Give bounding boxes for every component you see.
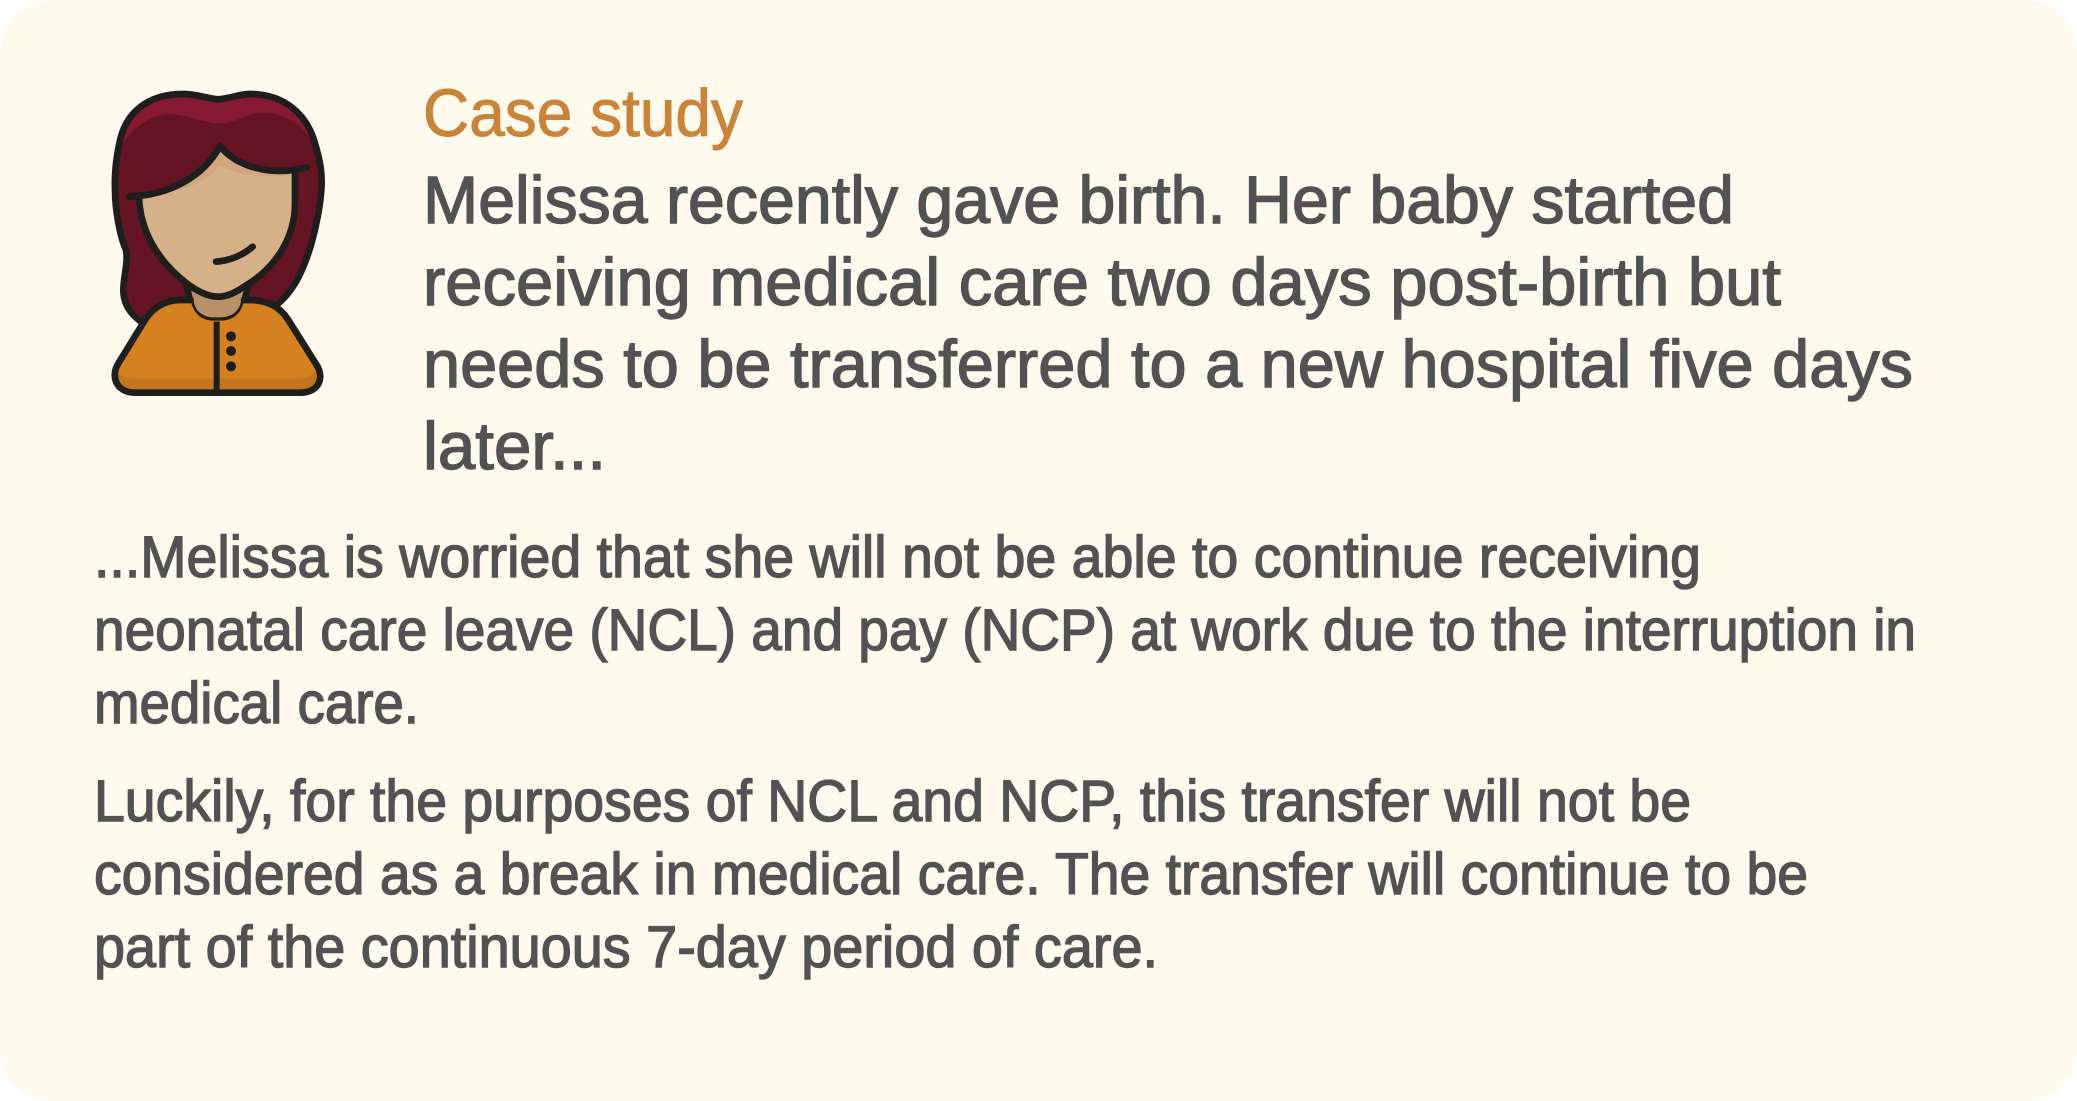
text block: intro	[423, 163, 1913, 484]
avatar neck	[186, 283, 248, 321]
avatar jacket	[110, 300, 327, 397]
heading: case study: Case study	[423, 76, 743, 151]
text block: transfer paragraph: Luckily, for the purposes of NCL and NCP, this transfer will not be	[94, 769, 1691, 834]
text block: transfer paragraph	[94, 769, 1808, 980]
text block: worry paragraph: medical care.	[94, 671, 419, 736]
avatar hair	[110, 94, 327, 330]
text block: transfer paragraph: part of the continuous 7-day period of care.	[94, 915, 1158, 980]
text block: worry paragraph: neonatal care leave (NCL) and pay (NCP) at work due to the interruption in	[94, 598, 1916, 663]
text block: intro: Melissa recently gave birth. Her baby started	[423, 163, 1734, 238]
text block: worry paragraph: ...Melissa is worried that she will not be able to continue receiving	[94, 525, 1701, 590]
text block: worry paragraph	[94, 525, 1916, 736]
text block: intro: needs to be transferred to a new hospital five days	[423, 327, 1913, 402]
text block: transfer paragraph: considered as a break in medical care. The transfer will continue to be	[94, 842, 1808, 907]
avatar face	[129, 143, 307, 297]
text block: intro: later...	[423, 409, 606, 484]
text block: intro: receiving medical care two days post-birth but	[423, 245, 1781, 320]
icon: woman avatar	[110, 94, 327, 397]
